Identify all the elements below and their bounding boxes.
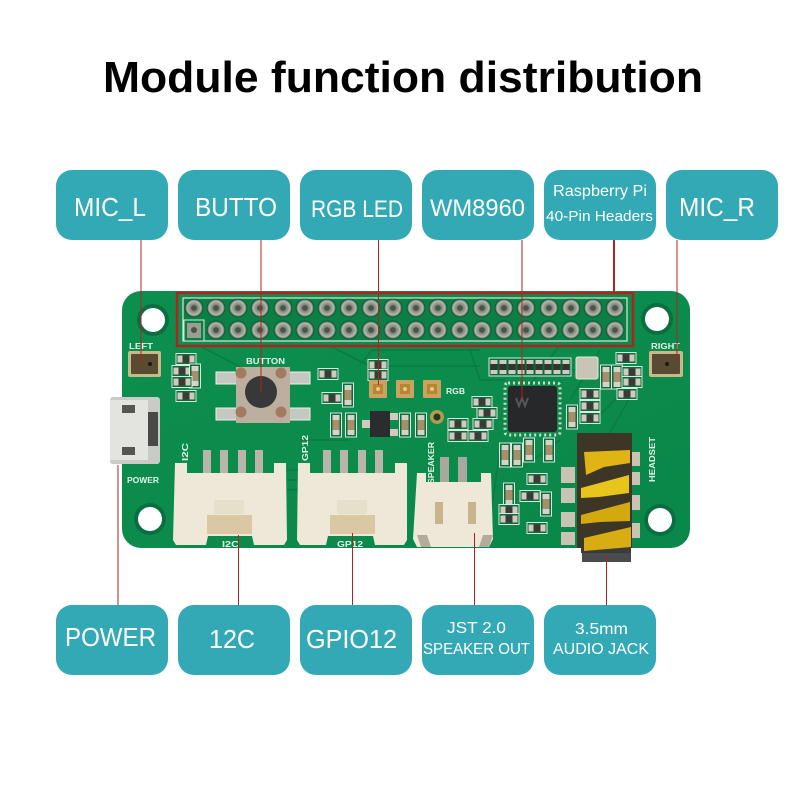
- mounting holes: [134, 303, 676, 536]
- label: Raspberry Pi 40-Pin Headers: [544, 170, 656, 240]
- transistor: [362, 411, 398, 437]
- label: Raspberry Pi 40-Pin Headers: 40-Pin Headers: [546, 209, 653, 225]
- label: 12C: [178, 605, 290, 675]
- circuit board: [110, 291, 690, 562]
- GP12 connector: [297, 450, 407, 545]
- silkscreen labels: I2C: [222, 540, 239, 549]
- label: MIC_L: MIC_L: [74, 192, 146, 222]
- label: MIC_R: [666, 170, 778, 240]
- leader lines: [118, 240, 677, 605]
- 40-pin header pins: [184, 298, 624, 341]
- title: Module function distribution: [103, 53, 703, 102]
- label: 3.5mm AUDIO JACK: 3.5mm: [575, 621, 628, 638]
- label: GPIO12: [300, 605, 412, 675]
- header outline: [183, 298, 627, 341]
- silkscreen labels: I2C: [181, 443, 190, 461]
- label: JST 2.0 SPEAKER OUT: SPEAKER OUT: [423, 641, 531, 658]
- silkscreen labels: RGB: [446, 387, 465, 396]
- label: BUTTO: [178, 170, 290, 240]
- test point: [430, 410, 444, 424]
- silkscreen labels: LEFT: [129, 342, 153, 351]
- label: POWER: [56, 605, 168, 675]
- label: 3.5mm AUDIO JACK: [544, 605, 656, 675]
- RGB LEDs: [369, 380, 441, 398]
- label: 3.5mm AUDIO JACK: AUDIO JACK: [553, 641, 650, 658]
- label: 12C: 12C: [209, 624, 255, 654]
- silkscreen labels: [127, 342, 680, 549]
- JST speaker connector: [413, 457, 493, 547]
- label: JST 2.0 SPEAKER OUT: JST 2.0: [447, 620, 506, 637]
- label: BUTTO: BUTTO: [195, 192, 277, 222]
- silkscreen labels: BUTTON: [246, 357, 285, 366]
- label: WM8960: WM8960: [430, 195, 525, 222]
- silkscreen labels: POWER: [127, 476, 159, 485]
- label: RGB LED: [300, 170, 412, 240]
- label: JST 2.0 SPEAKER OUT: [422, 605, 534, 675]
- micro USB power port: [110, 397, 160, 464]
- silkscreen labels: GP12: [337, 540, 364, 549]
- small SMD components: [172, 352, 642, 534]
- label: GPIO12: GPIO12: [306, 624, 397, 654]
- left microphone: [128, 351, 161, 377]
- label: POWER: POWER: [65, 622, 156, 652]
- crystal: [576, 357, 598, 379]
- silkscreen labels: HEADSET: [648, 437, 657, 482]
- WM8960 chip: [505, 383, 560, 435]
- silkscreen labels: SPEAKER: [427, 442, 436, 484]
- I2C connector: [173, 450, 287, 545]
- label: MIC_R: MIC_R: [679, 192, 755, 222]
- label: MIC_L: [56, 170, 168, 240]
- traces: [200, 345, 640, 520]
- red highlight around 40-pin header: [177, 293, 633, 346]
- tactile button: [216, 367, 310, 423]
- silkscreen labels: RIGHT: [651, 342, 680, 351]
- label: Raspberry Pi 40-Pin Headers: Raspberry Pi: [553, 183, 647, 200]
- silkscreen labels: GP12: [301, 434, 310, 461]
- label: RGB LED: RGB LED: [311, 196, 403, 223]
- audio jack: [561, 433, 640, 562]
- right microphone: [649, 351, 683, 377]
- label: WM8960: [422, 170, 534, 240]
